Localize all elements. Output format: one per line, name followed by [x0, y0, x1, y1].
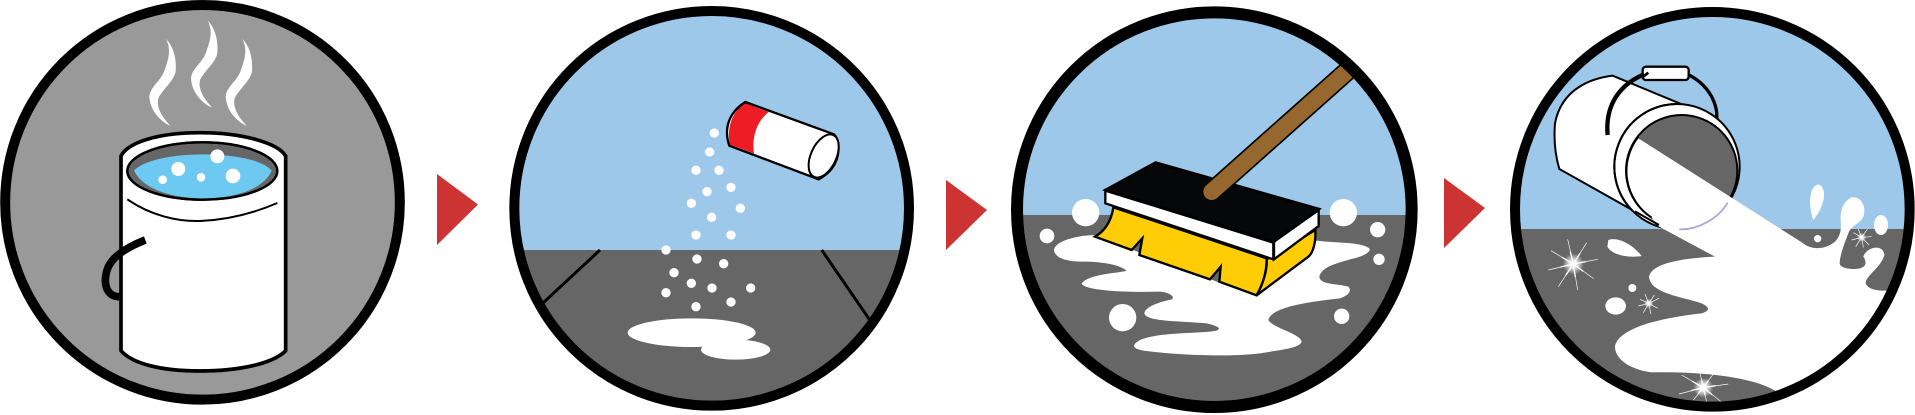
- lilac rim arc: [1679, 203, 1728, 229]
- icon: mug handle: [105, 240, 145, 297]
- falling salt grains: [661, 128, 755, 311]
- panel 4 ring: [1515, 12, 1910, 407]
- sparkle bottom: [1679, 373, 1728, 402]
- icon: steam wisps: [149, 21, 252, 126]
- panel 2 sky and floor: [519, 16, 904, 401]
- icon: bucket body: [1554, 74, 1682, 210]
- bucket inside: [1626, 115, 1737, 226]
- mug inner line: [127, 199, 277, 221]
- arrow 2: [946, 180, 987, 250]
- sparkle large left: [1548, 239, 1598, 290]
- panel: scrubbing with brush: [1011, 6, 1419, 415]
- soapy foam: [1054, 235, 1370, 355]
- icon: mug body: [121, 133, 286, 371]
- bucket rim: [1614, 104, 1740, 229]
- brush handle outline: [1212, 63, 1357, 192]
- icon: salt shaker: [727, 102, 845, 182]
- panel 2 ring: [514, 11, 909, 406]
- brush head: [1105, 162, 1319, 259]
- icon: bucket bail: [1607, 73, 1648, 135]
- brush bristles: [1095, 207, 1315, 295]
- sparkle small centre: [1638, 294, 1659, 314]
- arrow 3: [1444, 178, 1485, 248]
- foam bubbles: [1040, 199, 1385, 331]
- arrow 1: [437, 174, 478, 245]
- handle wood: [1212, 63, 1357, 192]
- sparkle right: [1852, 229, 1872, 247]
- panel: hot mug of water: [5, 5, 400, 400]
- panel 3 ring: [1017, 12, 1412, 407]
- salt pile: [628, 318, 770, 360]
- panel 1 ring: [5, 5, 400, 400]
- panel 4 sky and floor: [1520, 17, 1905, 402]
- icon: mug water surface: [127, 142, 277, 200]
- panel 1 grey background: [5, 5, 400, 400]
- panel: pouring bucket of water: [1510, 7, 1915, 415]
- bucket outlines: [1614, 104, 1677, 225]
- panel: sprinkling salt: [509, 6, 914, 413]
- icon: bail grip: [1642, 67, 1689, 80]
- pouring water spill: [1615, 138, 1887, 392]
- icon: bucket handle: [1689, 75, 1717, 121]
- panel 3 sky and floor: [1023, 18, 1406, 401]
- water droplets: [1605, 184, 1888, 315]
